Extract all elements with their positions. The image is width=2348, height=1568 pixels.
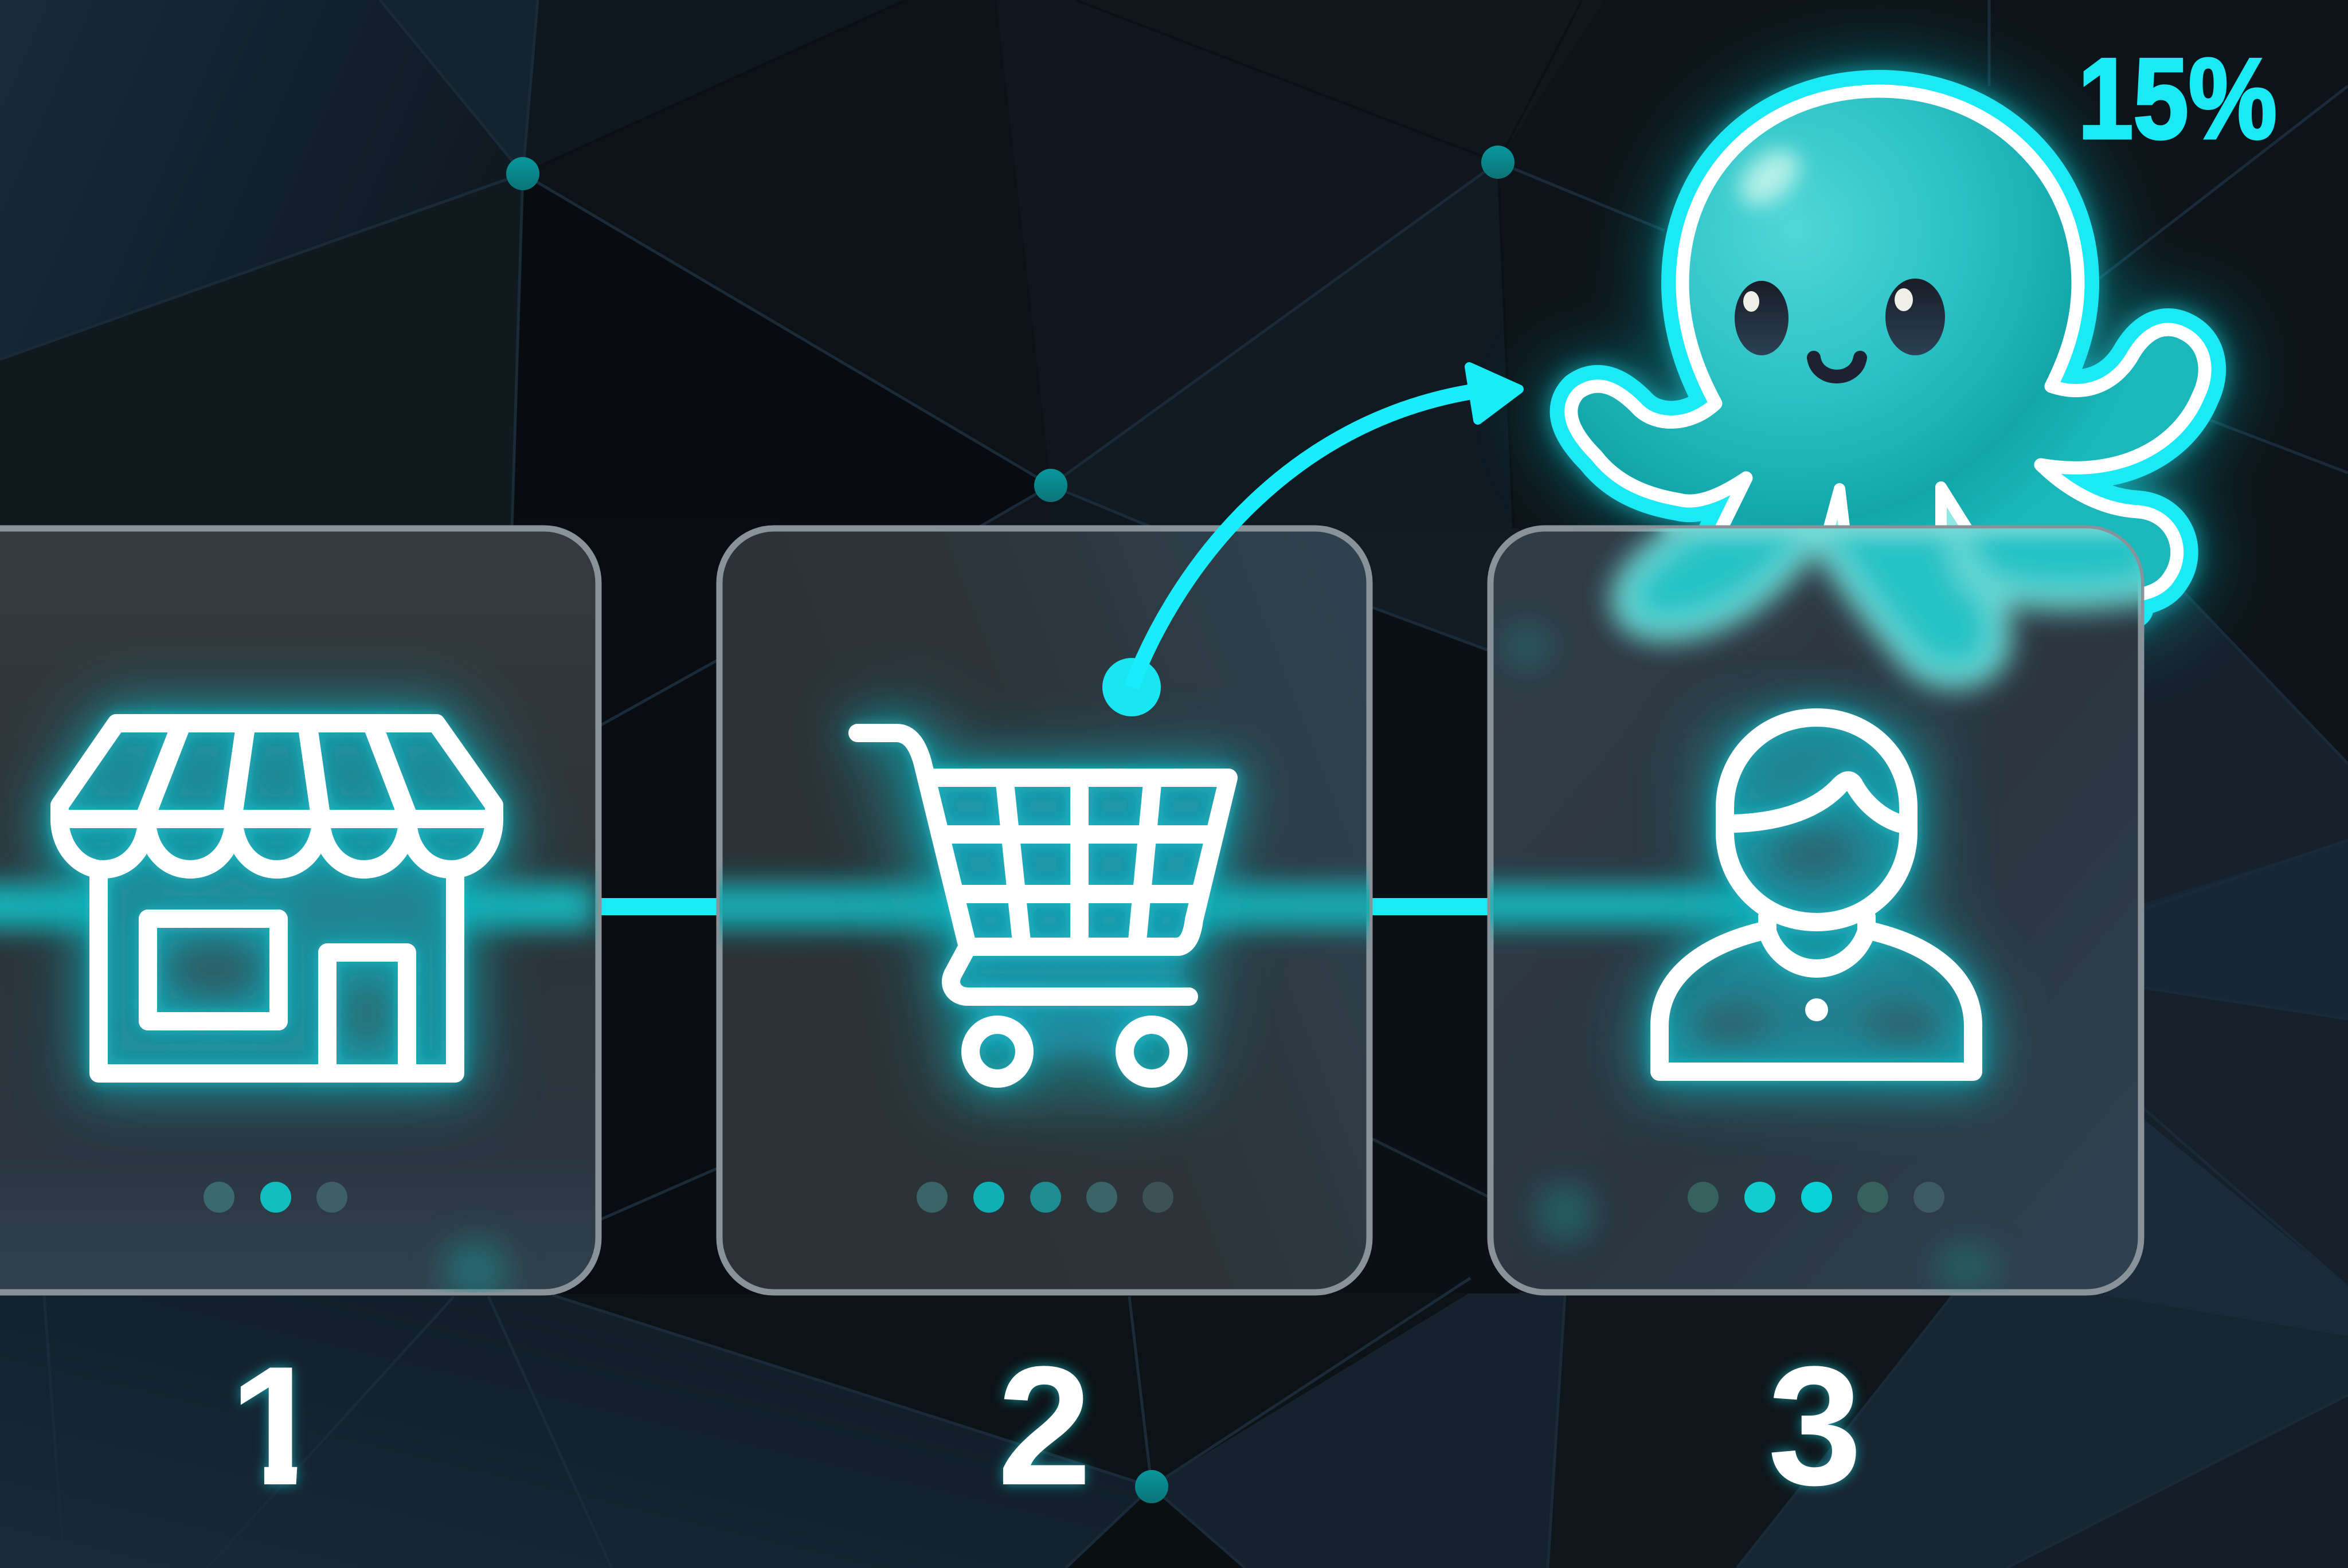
arrow: cart to octopus <box>1102 367 1519 716</box>
card 1: glow band <box>0 884 595 1301</box>
percentage label: 15% <box>2078 35 2277 163</box>
icon: store <box>60 723 494 1073</box>
icon: shopping cart <box>858 733 1228 1079</box>
step number 3: 3 <box>1768 1331 1862 1520</box>
octopus: head highlight <box>1729 139 1810 217</box>
card 3: progress dots <box>1688 1182 1944 1213</box>
connector line: step 2 to 3 <box>1367 898 1493 915</box>
network node: top left <box>506 157 539 190</box>
step number 1: 1 <box>229 1331 323 1520</box>
network node: centre <box>1034 469 1067 502</box>
card 1: store <box>0 528 598 1301</box>
network node: top right <box>1481 146 1515 179</box>
octopus: tentacle gaps <box>1823 487 1981 550</box>
step number 2: 2 <box>997 1331 1091 1520</box>
card 2: progress dots <box>917 1182 1173 1213</box>
network node: bottom <box>1135 1470 1168 1503</box>
octopus mascot <box>1571 91 2205 607</box>
octopus: smile <box>1814 358 1860 377</box>
icon: person <box>1660 718 1973 1072</box>
card 2: glow band <box>694 884 1393 928</box>
card 1: progress dots <box>204 1182 347 1213</box>
octopus: right eye <box>1885 279 1945 355</box>
connector line: step 1 to 2 <box>596 898 722 915</box>
octopus: left eye <box>1735 281 1789 355</box>
card 2: cart <box>694 528 1393 1292</box>
card 3: person <box>1468 510 2161 1292</box>
card 3: frosted octopus tentacles and glow band <box>1468 510 2161 1292</box>
